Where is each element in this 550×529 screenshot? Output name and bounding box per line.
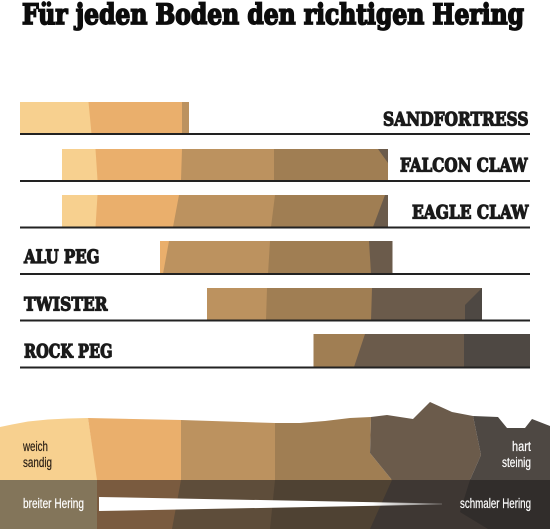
row: Sandfortress bbox=[20, 102, 530, 135]
row: Eagle Claw: EAGLE CLAW bbox=[412, 202, 529, 224]
row: Twister: TWISTER bbox=[24, 294, 108, 316]
row: Rock Peg bbox=[20, 334, 530, 368]
row: Alu Peg bbox=[20, 241, 530, 275]
terrain landscape bbox=[0, 402, 550, 529]
row: Twister bbox=[20, 288, 530, 322]
label: hart steinig: steinig bbox=[502, 455, 531, 470]
label: breiter Hering: breiter Hering bbox=[23, 496, 84, 511]
label: weich sandig: sandig bbox=[23, 455, 52, 470]
row: Alu Peg: ALU PEG bbox=[23, 247, 100, 268]
row: Rock Peg: ROCK PEG bbox=[24, 342, 112, 362]
row: Falcon Claw bbox=[20, 149, 530, 182]
wedge: peg width bbox=[99, 497, 442, 511]
label: hart steinig: hart bbox=[512, 439, 531, 454]
label: weich sandig: weich bbox=[22, 439, 48, 454]
row: Eagle Claw bbox=[20, 195, 530, 228]
